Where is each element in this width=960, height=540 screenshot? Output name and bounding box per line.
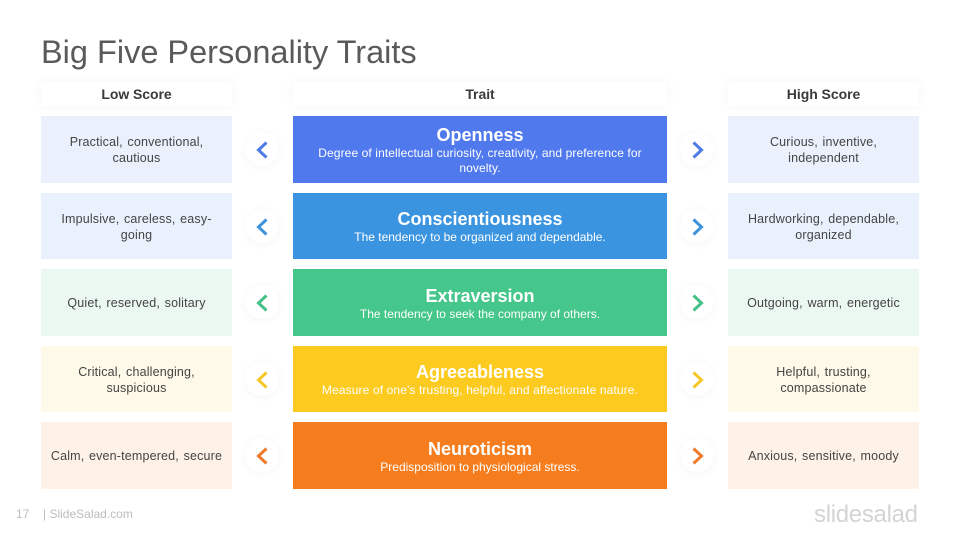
high score: conscientiousness: Hardworking, dependable, organized: [748, 212, 899, 242]
trait: conscientiousness: The tendency to be organized and dependable.: [354, 230, 606, 244]
arrow: neuroticism high: [680, 438, 714, 472]
trait: neuroticism: [293, 422, 667, 489]
arrow: extraversion high: [680, 285, 714, 319]
arrow: extraversion low: [245, 285, 279, 319]
trait: neuroticism: Neuroticism: [428, 438, 532, 458]
title: Big Five Personality Traits: [41, 34, 417, 70]
trait: neuroticism: Predisposition to physiological stress.: [380, 460, 580, 474]
arrow: conscientiousness high: [680, 209, 714, 243]
column header: low score: Low Score: [101, 86, 172, 102]
arrow: neuroticism low: [245, 438, 279, 472]
high score: extraversion: Outgoing, warm, energetic: [747, 296, 900, 310]
low score: extraversion: [41, 269, 232, 336]
page number: 17: [16, 507, 29, 521]
footer logo wordmark: slidesalad: [814, 501, 918, 528]
arrow: agreeableness high: [680, 362, 714, 396]
high score: extraversion: [728, 269, 919, 336]
arrow: openness low: [245, 132, 279, 166]
trait: openness: Degree of intellectual curiosity, creativity, and preference for novelty.: [318, 146, 642, 174]
trait: agreeableness: Agreeableness: [416, 362, 544, 382]
low score: agreeableness: Critical, challenging, suspicious: [78, 364, 195, 394]
low score: extraversion: Quiet, reserved, solitary: [67, 296, 206, 310]
high score: conscientiousness: [728, 193, 919, 259]
trait: agreeableness: [293, 346, 667, 412]
high score: neuroticism: [728, 422, 919, 489]
low score: openness: Practical, conventional, cautious: [70, 135, 203, 165]
column header: high score: [728, 82, 919, 106]
trait: agreeableness: Measure of one's trusting, helpful, and affectionate nature.: [322, 383, 638, 397]
low score: conscientiousness: [41, 193, 232, 259]
trait: extraversion: [293, 269, 667, 336]
footer site name: | SlideSalad.com: [43, 507, 133, 521]
trait: extraversion: Extraversion: [425, 286, 535, 306]
low score: conscientiousness: Impulsive, careless, easy-going: [61, 212, 212, 242]
trait: conscientiousness: Conscientiousness: [397, 209, 563, 229]
column header: low score: [41, 82, 232, 106]
arrow: openness high: [680, 132, 714, 166]
low score: openness: [41, 116, 232, 183]
arrow: agreeableness low: [245, 362, 279, 396]
high score: openness: Curious, inventive, independent: [770, 135, 877, 165]
high score: agreeableness: [728, 346, 919, 412]
trait: openness: [293, 116, 667, 183]
high score: openness: [728, 116, 919, 183]
low score: neuroticism: [41, 422, 232, 489]
low score: agreeableness: [41, 346, 232, 412]
trait: extraversion: The tendency to seek the company of others.: [360, 306, 600, 320]
high score: neuroticism: Anxious, sensitive, moody: [748, 449, 899, 463]
column header: high score: High Score: [787, 86, 860, 102]
column header: trait: Trait: [465, 86, 495, 102]
trait: openness: Openness: [436, 124, 524, 144]
low score: neuroticism: Calm, even-tempered, secure: [51, 449, 222, 463]
trait: conscientiousness: [293, 193, 667, 259]
high score: agreeableness: Helpful, trusting, compassionate: [776, 364, 871, 394]
arrow: conscientiousness low: [245, 209, 279, 243]
column header: trait: [293, 82, 667, 106]
